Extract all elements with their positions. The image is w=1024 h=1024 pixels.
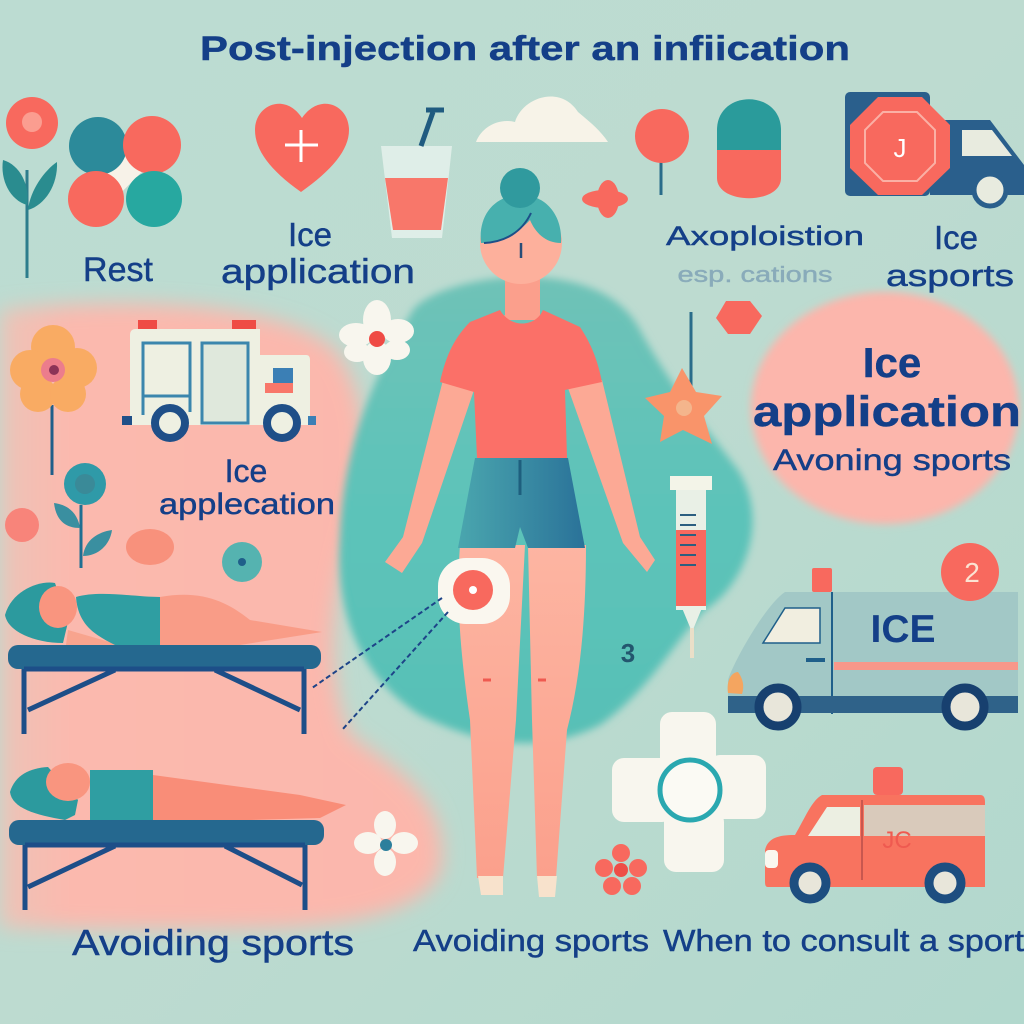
hair (481, 195, 561, 243)
text: avoiding sports center: Avoiding sports (413, 923, 649, 958)
feet (478, 876, 503, 895)
icon: syringe (670, 476, 712, 658)
label: garbled heading top right: esp. cations (678, 262, 832, 287)
icon: ambulance top left panel (122, 320, 316, 438)
icon: red van: JC (882, 827, 912, 854)
figure: standing woman (385, 168, 655, 897)
label: ice asports: Ice (934, 219, 978, 256)
text: avoiding sports left: Avoiding sports (72, 922, 354, 963)
icon: heart with plus (255, 104, 349, 192)
label: ice application left: application (221, 253, 415, 291)
label: ice application right callout (753, 339, 1021, 477)
title: Post-injection after an infiication (200, 30, 850, 68)
shirt (440, 310, 602, 458)
icon: capsule (717, 99, 781, 198)
arrows: dashed lines from knee to table (312, 598, 448, 730)
label: ice applecation (159, 453, 335, 521)
icon: drink cup with straw (381, 110, 452, 238)
icon: truck with stop sign (845, 92, 1024, 206)
icon: knee bandage (438, 558, 510, 624)
icon: orange flower left (10, 325, 97, 475)
label: garbled heading top right (666, 221, 864, 287)
icon: small white flower lower (354, 811, 418, 876)
legs (458, 545, 525, 878)
icon: small coral flower (595, 844, 647, 895)
icon: coral number badge: 2 (964, 557, 980, 588)
icon: four-circle rest symbol (68, 116, 182, 227)
shorts (458, 458, 585, 548)
label: ice application right callout: Ice (863, 339, 921, 386)
label: ice application left (221, 216, 415, 291)
label: garbled heading top right: Axoploistion (666, 221, 864, 251)
text: when to consult a sport: When to consult a sport (663, 923, 1024, 958)
icon: small coral cross (582, 180, 628, 218)
label: ice application right callout: application (753, 388, 1021, 436)
icon: small left dots (5, 508, 262, 582)
icon: small hexagon (716, 301, 762, 334)
icon: coral flower top left (2, 97, 58, 278)
panel: left pink background (0, 304, 442, 929)
icon: cloud (476, 97, 608, 142)
icon: ambulance ICE van: ICE (870, 608, 936, 651)
icon: white flower (339, 300, 414, 375)
label: ice applecation: Ice (225, 453, 267, 489)
icon: white cross bandage (612, 712, 766, 872)
icon: ambulance ICE van (728, 568, 1018, 726)
label: ice applecation: applecation (159, 488, 335, 521)
icon: truck with stop sign: J (894, 133, 906, 163)
panel: right pink ellipse (751, 292, 1019, 524)
knee marks (483, 678, 546, 682)
arms (385, 380, 474, 573)
neck and head (498, 275, 548, 320)
label: ice asports (886, 219, 1014, 293)
illustration: person on table lower (9, 763, 346, 910)
panel: central teal blob (339, 277, 753, 743)
label: ice application left: Ice (288, 216, 332, 253)
icon: red van (765, 767, 985, 899)
icon: coral lollipop (635, 109, 689, 195)
label: ice asports: asports (886, 258, 1014, 293)
text: small 3: 3 (621, 638, 635, 668)
icon: orange star flower (645, 312, 722, 444)
label: rest: Rest (83, 251, 154, 289)
icon: coral number badge (941, 543, 999, 601)
label: ice application right callout: Avoning sports (773, 444, 1011, 477)
icon: teal flower (54, 463, 112, 568)
illustration: person on table upper (5, 582, 322, 734)
